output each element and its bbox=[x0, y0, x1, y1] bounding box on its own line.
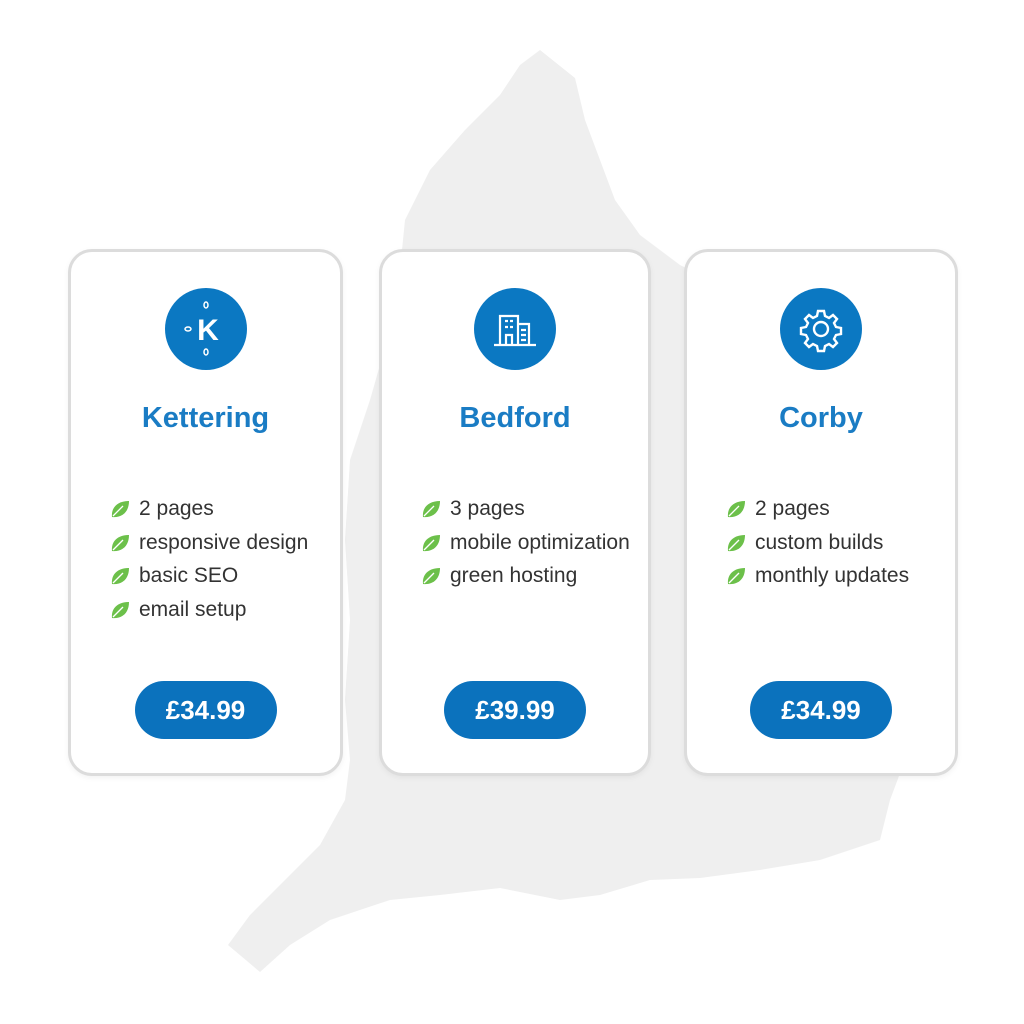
icon: building bbox=[474, 288, 556, 370]
price bbox=[444, 681, 586, 739]
feature list: email setup bbox=[139, 598, 246, 621]
feature list: monthly updates bbox=[755, 564, 909, 587]
price bbox=[134, 681, 276, 739]
feature list bbox=[728, 497, 909, 587]
card: Bedford bbox=[379, 249, 651, 776]
feature list: 2 pages bbox=[139, 497, 214, 520]
icon: K compass bbox=[164, 288, 246, 370]
price: £34.99 bbox=[781, 695, 861, 725]
card: Corby bbox=[684, 249, 958, 776]
feature list bbox=[422, 497, 630, 587]
feature list: custom builds bbox=[755, 531, 883, 554]
feature list: green hosting bbox=[450, 564, 577, 587]
price: £39.99 bbox=[475, 695, 555, 725]
price: £34.99 bbox=[166, 695, 245, 725]
feature list: basic SEO bbox=[139, 564, 238, 587]
card: Kettering bbox=[68, 249, 343, 776]
feature list: mobile optimization bbox=[450, 531, 630, 554]
icon: K compass: K bbox=[197, 314, 219, 347]
title: Corby bbox=[779, 402, 863, 434]
title: Bedford bbox=[459, 402, 571, 434]
price bbox=[750, 681, 892, 739]
feature list: 3 pages bbox=[450, 497, 525, 520]
icon: gear bbox=[780, 288, 862, 370]
title: Kettering bbox=[142, 402, 269, 434]
feature list: responsive design bbox=[139, 531, 308, 554]
feature list bbox=[112, 497, 308, 621]
feature list: 2 pages bbox=[755, 497, 830, 520]
